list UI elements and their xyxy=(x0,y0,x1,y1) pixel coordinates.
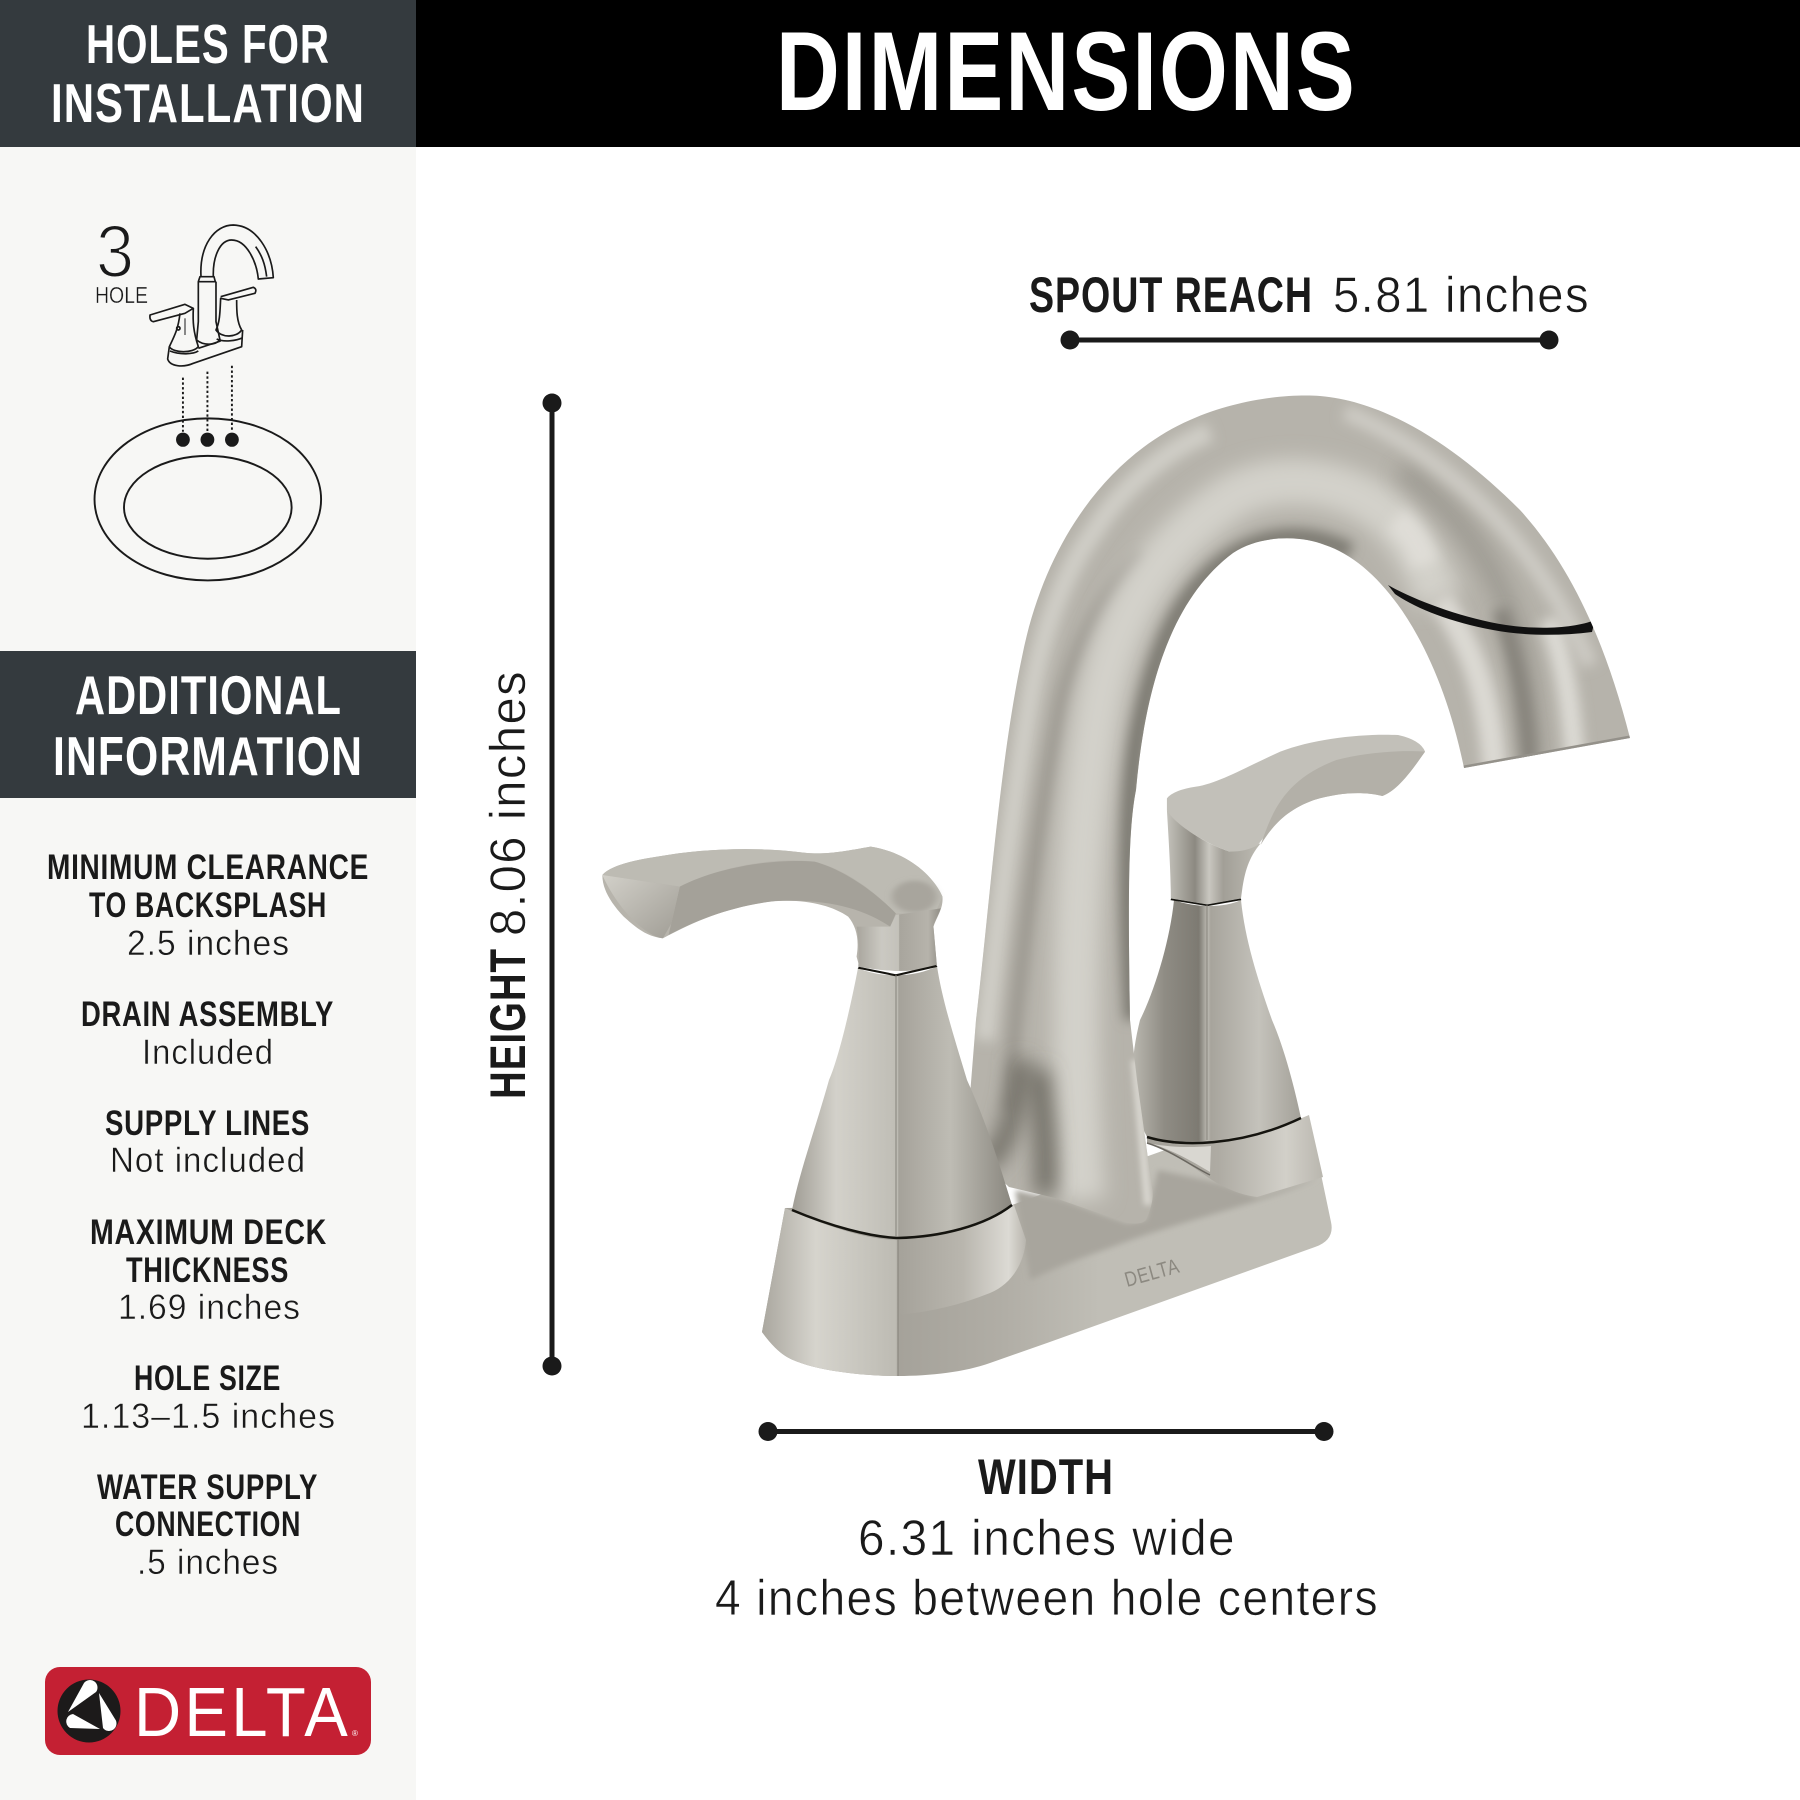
spec: minimum clearance xyxy=(47,848,369,963)
dimension: spout reach: 5.81 inches xyxy=(1333,267,1590,323)
spec: supply lines xyxy=(105,1104,310,1180)
panel heading: holes for installation: HOLES FOR xyxy=(86,13,330,75)
dimension: width: WIDTH xyxy=(978,1449,1114,1505)
dimension: spout reach xyxy=(1029,267,1590,350)
background: left information panel xyxy=(0,0,416,1800)
spec: drain assembly: Included xyxy=(142,1033,274,1072)
seam lines xyxy=(792,1118,1301,1238)
panel heading: additional information: INFORMATION xyxy=(53,725,363,787)
dimension: height: 8.06 inches xyxy=(480,670,536,936)
panel heading: additional information xyxy=(0,651,416,798)
dimension: width: 4 inches between hole centers xyxy=(715,1570,1379,1626)
right handle base cone xyxy=(1133,900,1301,1142)
icon: 3 hole faucet and sink diagram: 3 xyxy=(96,210,134,293)
panel heading: additional information: ADDITIONAL xyxy=(75,664,342,726)
dimension: height xyxy=(480,394,562,1376)
faucet spout xyxy=(960,380,1650,1240)
spec: maximum deck thickness: MAXIMUM DECK xyxy=(90,1213,327,1252)
right handle and stem xyxy=(1167,735,1425,905)
spec: minimum clearance: 2.5 inches xyxy=(127,924,290,963)
spec: maximum deck thickness: THICKNESS xyxy=(126,1251,289,1290)
icon: 3 hole faucet and sink diagram: HOLE xyxy=(95,282,148,308)
label: delta mark on faucet base: DELTA xyxy=(1122,1255,1182,1292)
spec: drain assembly: DRAIN ASSEMBLY xyxy=(81,995,334,1034)
spec: supply lines: SUPPLY LINES xyxy=(105,1104,310,1143)
title band: dimensions xyxy=(416,0,1800,147)
left lever handle xyxy=(602,847,943,975)
logo: delta: DELTA xyxy=(134,1673,351,1751)
dimension: width xyxy=(715,1422,1379,1626)
panel heading: holes for installation: INSTALLATION xyxy=(51,72,365,134)
spec: maximum deck thickness: 1.69 inches xyxy=(118,1288,301,1327)
logo: delta xyxy=(45,1667,371,1755)
logo: delta: ® xyxy=(352,1729,358,1738)
dimension: width: 6.31 inches wide xyxy=(858,1510,1236,1566)
panel heading: holes for installation xyxy=(0,0,416,147)
spec: water supply connection xyxy=(97,1468,318,1582)
left handle base block xyxy=(762,1205,1026,1376)
spec: maximum deck thickness xyxy=(90,1213,327,1327)
faucet base plate xyxy=(762,1115,1332,1376)
spec: supply lines: Not included xyxy=(110,1141,306,1180)
spec: hole size: 1.13–1.5 inches xyxy=(81,1397,336,1436)
spec: hole size: HOLE SIZE xyxy=(134,1359,281,1398)
spec: water supply connection: WATER SUPPLY xyxy=(97,1468,318,1507)
spec: drain assembly xyxy=(81,995,334,1072)
left handle base cone xyxy=(792,966,1012,1237)
title band: dimensions: DIMENSIONS xyxy=(776,9,1357,134)
spec: hole size xyxy=(81,1359,336,1436)
product: faucet illustration xyxy=(602,380,1650,1376)
spec: minimum clearance: TO BACKSPLASH xyxy=(89,886,327,925)
dimension: spout reach: SPOUT REACH xyxy=(1029,267,1313,323)
icon: 3 hole faucet and sink diagram xyxy=(95,210,321,580)
spec: water supply connection: CONNECTION xyxy=(115,1505,301,1544)
dimension: height: HEIGHT xyxy=(480,948,536,1099)
spec: minimum clearance: MINIMUM CLEARANCE xyxy=(47,848,369,887)
spec: water supply connection: .5 inches xyxy=(137,1543,279,1582)
